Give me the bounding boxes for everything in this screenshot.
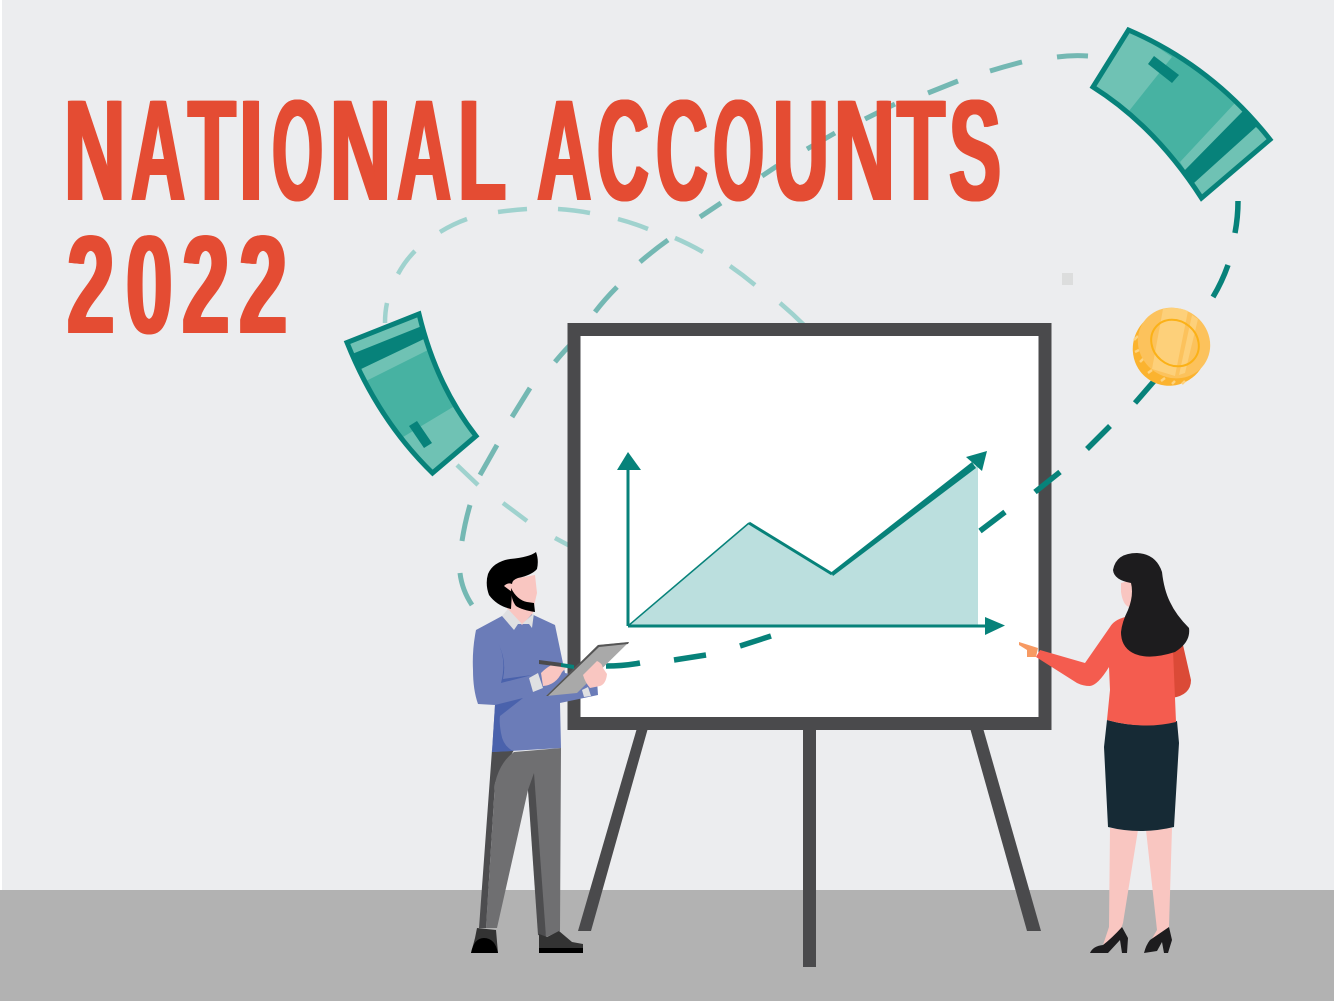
presentation board: [574, 330, 1045, 724]
title line 1: O: [272, 70, 323, 231]
second cuff: [582, 687, 591, 697]
title line 1: A: [397, 70, 451, 231]
title line 1: U: [773, 70, 828, 231]
dashed path: teal arc from banknote to lower left: [460, 56, 1088, 605]
title line 1: C: [597, 70, 649, 231]
beard: [511, 588, 535, 612]
title line 1: N: [330, 70, 391, 231]
skirt: [1104, 720, 1179, 831]
title line 1: T: [897, 70, 945, 231]
title line 1: [64, 70, 1001, 231]
title line 1: I: [239, 70, 263, 231]
dashed path: light loop behind board: [385, 209, 805, 546]
title line 2: 2: [239, 206, 287, 363]
title line 1: O: [713, 70, 764, 231]
hair: [487, 552, 538, 609]
title line 1: A: [131, 70, 185, 231]
face: [1121, 580, 1132, 607]
banknote: left: [347, 314, 476, 473]
collar: [502, 609, 534, 630]
trousers: [479, 748, 561, 937]
floor: [0, 890, 1334, 1001]
man with clipboard: [471, 552, 629, 953]
pen: [539, 660, 574, 669]
sweater: [473, 612, 598, 752]
far sleeve: [1170, 645, 1191, 698]
banknote: top right: [1093, 30, 1270, 198]
gold coin: [1119, 294, 1224, 399]
clipboard: [546, 642, 629, 696]
neck and face: [504, 575, 537, 625]
sweater shadow: [492, 643, 532, 752]
title line 1: N: [64, 70, 126, 231]
title line 2: 2: [182, 206, 230, 363]
title line 1: L: [458, 70, 506, 231]
cuff: [529, 673, 543, 692]
easel stand: [578, 728, 1041, 967]
title line 1: C: [656, 70, 708, 231]
dashed path: dark teal through coin and chart: [606, 201, 1238, 666]
woman pointing: [1019, 553, 1191, 953]
shoes: [471, 928, 583, 953]
blouse: [1036, 617, 1176, 726]
pointing hand: [1019, 642, 1038, 657]
small square mark: [1062, 273, 1073, 285]
title line 1: N: [834, 70, 895, 231]
title line 1: A: [537, 70, 591, 231]
long hair: [1113, 553, 1189, 657]
area chart: [617, 451, 1005, 635]
hand with pen: [541, 663, 566, 686]
title line 2: 0: [126, 206, 172, 363]
title: [64, 70, 1001, 363]
title line 2: 2: [67, 206, 115, 363]
title line 2: [67, 206, 287, 363]
high heels: [1090, 927, 1172, 953]
legs: [1103, 828, 1172, 945]
front fingers: [583, 661, 607, 688]
title line 1: T: [188, 70, 236, 231]
title line 1: S: [949, 70, 1001, 231]
